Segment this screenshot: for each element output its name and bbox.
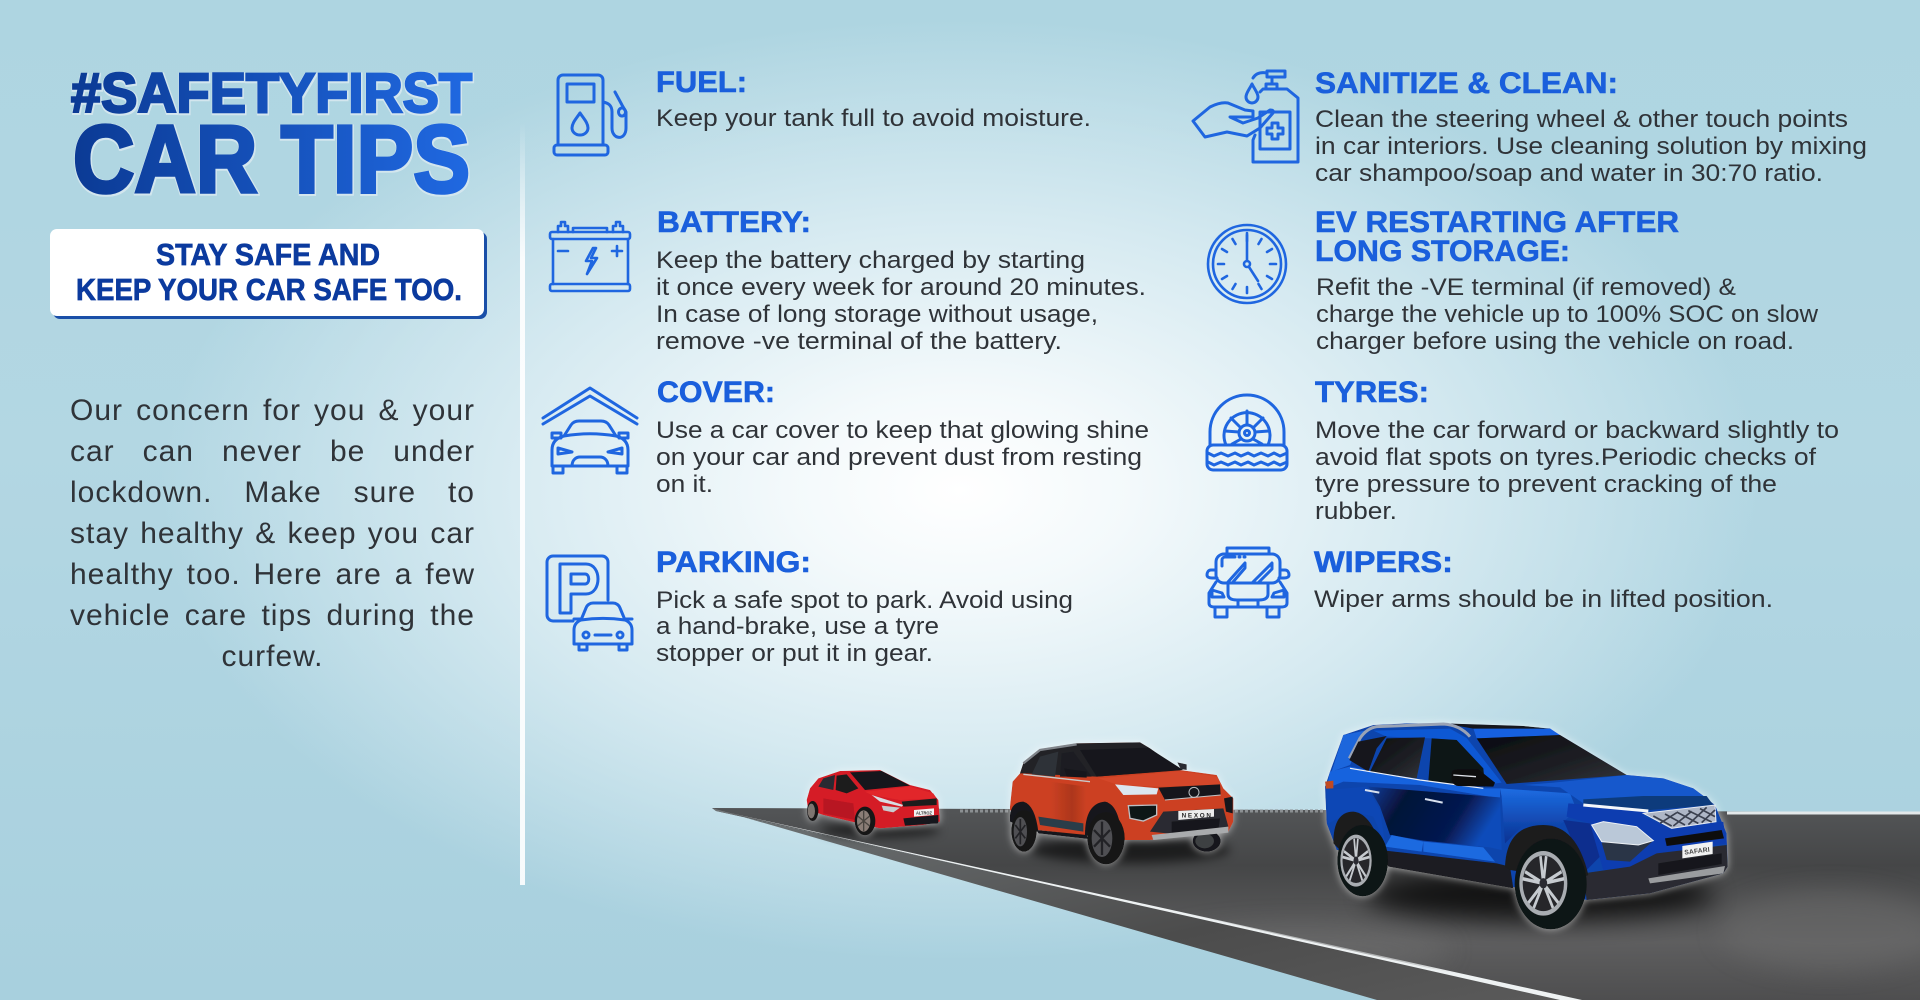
title: CAR TIPS	[73, 106, 470, 213]
callout: stay safe: KEEP YOUR CAR SAFE TOO.	[76, 272, 462, 307]
heading: WIPERS:	[1314, 546, 1453, 579]
text block: car shampoo/soap and water in 30:70 ratio.	[1315, 160, 1823, 187]
plate	[1682, 842, 1713, 858]
text block: in car interiors. Use cleaning solution by mixing	[1315, 133, 1867, 160]
arches	[1505, 825, 1588, 880]
panel: cover tip	[543, 376, 1149, 498]
heading: TYRES:	[1315, 376, 1429, 409]
bumper	[1583, 845, 1728, 900]
icon: car with wipers	[1207, 548, 1289, 617]
text block	[1316, 274, 1819, 355]
heading: SANITIZE & CLEAN:	[1315, 67, 1618, 100]
text block: charge the vehicle up to 100% SOC on slow	[1316, 301, 1819, 328]
text block: Refit the -VE terminal (if removed) &	[1316, 274, 1736, 301]
text block: a hand-brake, use a tyre	[656, 613, 939, 640]
text block: rubber.	[1315, 498, 1397, 525]
text block: stopper or put it in gear.	[656, 640, 933, 667]
text block: Clean the steering wheel & other touch points	[1315, 106, 1848, 133]
hood	[1523, 775, 1708, 808]
panel: EV restarting tip	[1208, 206, 1819, 355]
car shadows	[820, 822, 1715, 921]
text block: intro paragraph: Our concern for you & your	[70, 394, 475, 427]
text block	[656, 587, 1073, 667]
text block: intro paragraph: healthy too. Here are a few	[70, 558, 475, 591]
divider	[520, 122, 525, 885]
text block: In case of long storage without usage,	[656, 301, 1098, 328]
icon: clock	[1208, 225, 1286, 303]
icon: parking sign with car	[547, 556, 632, 650]
car: blue SUV: SAFARI	[1684, 847, 1710, 857]
callout: stay safe	[50, 229, 487, 319]
panel: tyres tip	[1207, 376, 1839, 525]
panel: fuel tip	[554, 66, 1091, 155]
text block	[656, 247, 1146, 355]
icon: car under roof	[543, 388, 637, 473]
text block: on it.	[656, 471, 713, 498]
wheels	[1337, 825, 1388, 896]
text block: Move the car forward or backward slightly to	[1315, 417, 1839, 444]
icon: fuel pump	[554, 75, 626, 155]
text block: intro paragraph: car can never be under	[70, 435, 475, 468]
car: red hatchback: ALTROZ	[916, 810, 932, 815]
text block: Use a car cover to keep that glowing shine	[656, 417, 1149, 444]
heading: FUEL:	[656, 66, 747, 99]
panel: wipers tip	[1207, 546, 1773, 617]
text block: Pick a safe spot to park. Avoid using	[656, 587, 1073, 614]
text block: intro paragraph: vehicle care tips during the	[70, 599, 475, 632]
title: #SAFETYFIRST	[71, 61, 472, 124]
heading	[1315, 206, 1679, 268]
heading: BATTERY:	[657, 206, 811, 239]
heading: LONG STORAGE:	[1315, 235, 1570, 268]
title	[71, 61, 472, 213]
panel: battery tip	[550, 206, 1146, 355]
text block: Keep the battery charged by starting	[656, 247, 1085, 274]
body	[1325, 723, 1728, 900]
callout: stay safe: STAY SAFE AND	[156, 237, 380, 272]
icon: battery	[550, 222, 630, 291]
text block: avoid flat spots on tyres.Periodic checks of	[1315, 444, 1816, 471]
text block: intro paragraph	[70, 394, 475, 673]
text block: intro paragraph: lockdown. Make sure to	[70, 476, 475, 509]
text block	[1315, 417, 1839, 525]
text block: remove -ve terminal of the battery.	[656, 328, 1062, 355]
panel: sanitize tip	[1193, 67, 1867, 187]
heading: COVER:	[657, 376, 775, 409]
text block: on your car and prevent dust from resting	[656, 444, 1142, 471]
heading: EV RESTARTING AFTER	[1315, 206, 1679, 239]
text block	[656, 417, 1149, 498]
road	[712, 808, 1920, 1000]
car: red hatchback	[807, 770, 940, 835]
text block: tyre pressure to prevent cracking of the	[1315, 471, 1777, 498]
car: orange SUV	[1010, 742, 1233, 864]
text block: Keep your tank full to avoid moisture.	[656, 105, 1091, 132]
grille	[1643, 805, 1716, 828]
icon: hand sanitizer	[1193, 71, 1298, 162]
heading: PARKING:	[656, 546, 811, 579]
text block	[1315, 106, 1867, 187]
car: blue SUV	[1325, 723, 1728, 929]
text block: it once every week for around 20 minutes.	[656, 274, 1146, 301]
panel: parking tip	[547, 546, 1073, 667]
icon: tyre	[1207, 395, 1287, 470]
text block: intro paragraph: stay healthy & keep you car	[70, 517, 475, 550]
text block: intro paragraph: curfew.	[221, 640, 324, 673]
text block: Wiper arms should be in lifted position.	[1314, 586, 1773, 613]
text block: charger before using the vehicle on road.	[1316, 328, 1794, 355]
headlight	[1602, 841, 1653, 862]
car: orange SUV: NEXON	[1182, 812, 1211, 819]
